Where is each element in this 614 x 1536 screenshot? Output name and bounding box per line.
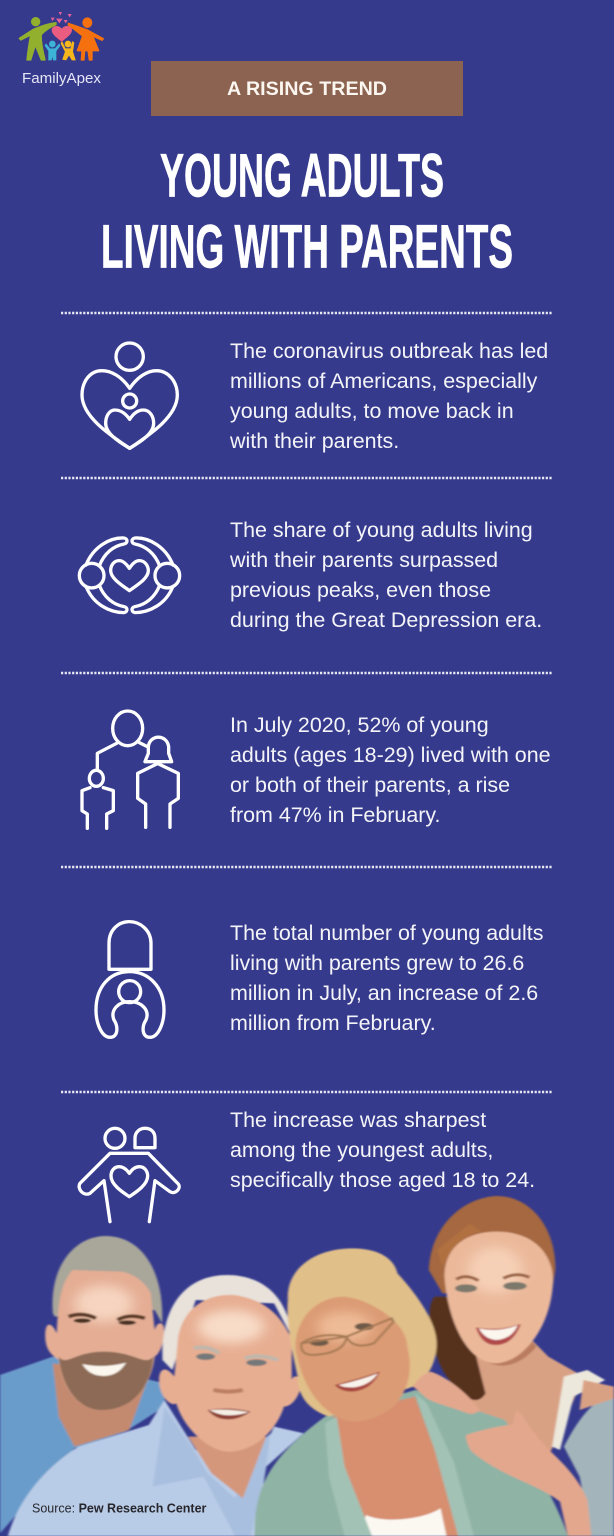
text: July 2020 share: In July 2020, 52% of young: [230, 713, 489, 737]
young woman: [429, 1196, 614, 1536]
text: total number of young adults: [230, 921, 543, 1035]
text: surpassed previous peaks: [229, 518, 542, 632]
photo: smiling family of four: [0, 1196, 614, 1536]
icon: family of three: [82, 711, 178, 828]
text: July 2020 share: adults (ages 18-29) lived with one: [230, 743, 551, 767]
text: total number of young adults: living with parents grew to 26.6: [230, 951, 524, 975]
older man: [8, 1275, 303, 1536]
banner: a rising trend: [151, 61, 463, 116]
banner: a rising trend: A RISING TREND: [227, 79, 387, 100]
text: total number of young adults: million from February.: [230, 1011, 436, 1035]
text: coronavirus outbreak: millions of Americans, especially: [230, 369, 538, 393]
icon: family with heart: [19, 12, 103, 60]
text: surpassed previous peaks: during the Great Depression era.: [230, 608, 542, 632]
text: coronavirus outbreak: The coronavirus outbreak has led: [230, 339, 548, 363]
icon: two people around a heart: [79, 538, 180, 613]
logo: FamilyApex: [19, 12, 103, 87]
text: coronavirus outbreak: with their parents.: [229, 429, 399, 453]
icon: two people and heart: [79, 1128, 179, 1222]
text: surpassed previous peaks: The share of young adults living: [230, 518, 533, 542]
older woman: [255, 1248, 568, 1536]
text: July 2020 share: or both of their parents, a rise: [230, 773, 510, 797]
text: coronavirus outbreak: [229, 339, 548, 453]
text: sharpest among youngest: The increase was sharpest: [230, 1108, 486, 1132]
source: Source: Pew Research Center: [32, 1502, 207, 1516]
hands: [413, 1372, 591, 1536]
title: [101, 142, 513, 280]
icon: parent above child: [96, 922, 164, 1037]
text: total number of young adults: million in July, an increase of 2.6: [230, 981, 538, 1005]
text: sharpest among youngest: [230, 1108, 535, 1192]
text: sharpest among youngest: among the youngest adults,: [230, 1138, 493, 1162]
icon: heart with parent and child: [82, 343, 177, 448]
young man: [0, 1236, 164, 1533]
text: total number of young adults: The total number of young adults: [230, 921, 543, 945]
text: July 2020 share: [230, 713, 551, 827]
text: surpassed previous peaks: previous peaks, even those: [230, 578, 491, 602]
text: July 2020 share: from 47% in February.: [230, 803, 440, 827]
text: surpassed previous peaks: with their parents surpassed: [229, 548, 498, 572]
brand name: FamilyApex: [22, 71, 102, 87]
text: sharpest among youngest: specifically those aged 18 to 24.: [230, 1168, 535, 1192]
text: coronavirus outbreak: young adults, to move back in: [230, 399, 514, 423]
